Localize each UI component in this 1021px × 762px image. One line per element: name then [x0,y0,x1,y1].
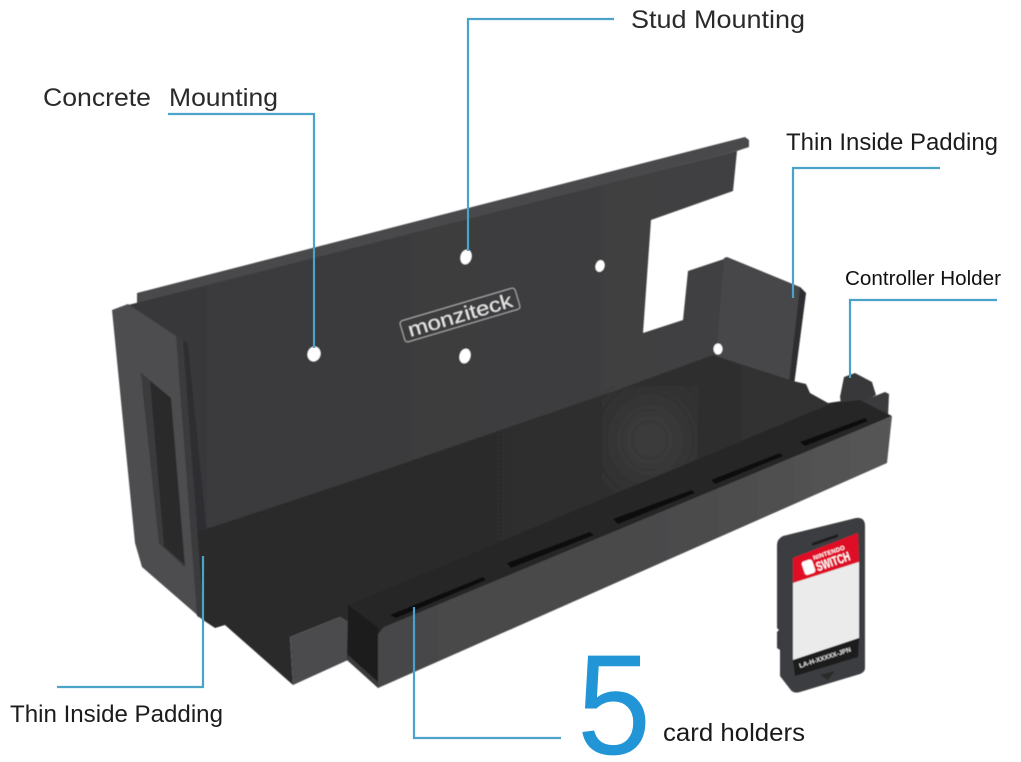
label: controller holder: Controller Holder [845,268,1001,290]
leader line: right thin padding [793,168,940,298]
logo badge: monziteck [405,290,516,342]
mounting holes [306,248,722,365]
card slots [390,418,868,618]
card box top strip [348,400,892,634]
label: concrete mounting [43,84,278,112]
label: stud mounting: Stud Mounting [631,6,805,34]
card code strip [793,638,859,676]
back wall with top ledge and cutout [128,137,749,560]
lower flap [290,617,348,685]
label: thin inside padding right: Thin Inside Padding [786,129,998,156]
card arrow [820,671,835,680]
card white label [793,562,859,660]
floor highlight [610,395,690,485]
label: thin inside padding left: Thin Inside Padding [10,701,223,728]
card code text: LA-H-XXXXX-JPN [798,646,852,670]
leader line: left thin padding [57,556,203,687]
product: wall mount dock [112,137,892,688]
card logo text: SWITCH [814,549,852,574]
tray floor [188,355,862,685]
label: concrete mounting: Concrete [43,84,151,112]
leader line: stud mounting [468,19,614,251]
card body [777,518,865,693]
logo badge [399,287,521,344]
card box front face [378,416,892,688]
controller holder tab [840,373,889,417]
leader line: controller holder [850,300,997,378]
card top notch [812,534,838,546]
card red band [793,533,859,583]
label: concrete mounting: Mounting [169,84,278,112]
left end panel [112,304,204,620]
right side panel [716,257,806,385]
card logo text: NINTENDO [813,545,846,562]
game card [777,518,865,693]
card box end [347,605,379,688]
leader line: card holders [414,607,561,738]
card logo text [800,545,852,578]
left panel window [141,373,185,566]
label: card holders: card holders [663,719,805,747]
leader line: concrete mounting [168,114,314,348]
